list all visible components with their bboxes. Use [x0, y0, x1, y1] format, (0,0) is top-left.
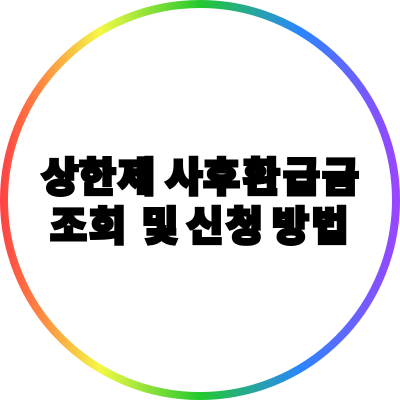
title line 2: 조회 및 신청 방법: [50, 205, 348, 249]
title line 1: 상한제 사후환급금: [42, 156, 359, 200]
title: [42, 156, 359, 249]
